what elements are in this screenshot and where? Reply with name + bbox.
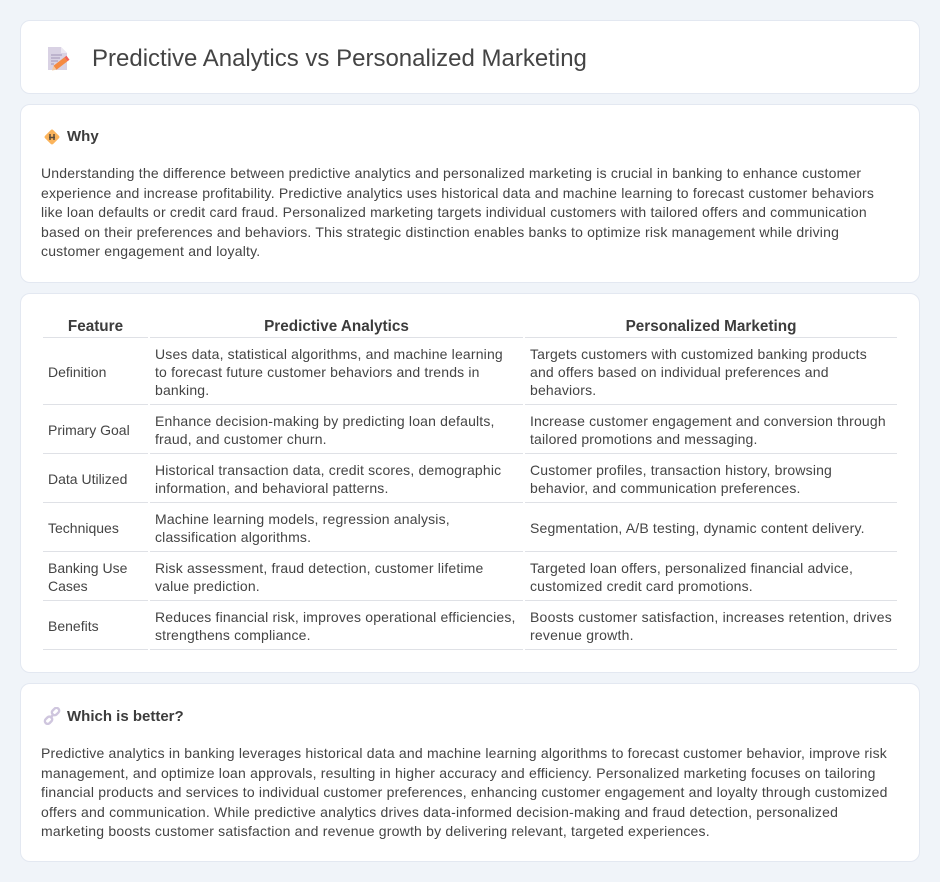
row label: definition: Definition	[48, 364, 106, 380]
cell: personalized benefits	[530, 609, 892, 643]
cell: personalized use cases: customized credit card promotions.	[530, 578, 753, 594]
cell: predictive benefits	[155, 609, 516, 643]
cell: personalized benefits: Boosts customer satisfaction, increases retention, drives	[530, 609, 892, 625]
cell: predictive benefits: strengthens compliance.	[155, 627, 311, 643]
text: which is better paragraph: offers and communication. While predictive analytics drives data-informed decision-making and fraud detection, personalized	[41, 804, 838, 820]
text: which is better paragraph: management, and optimize loan approvals, resulting in higher accuracy and efficiency. Personalized marketing focuses on tailoring	[41, 765, 876, 781]
cell: predictive use cases	[155, 560, 483, 594]
panel: why	[20, 104, 920, 283]
cell: predictive data: Historical transaction data, credit scores, demographic	[155, 462, 501, 478]
icon: warning diamond	[44, 130, 60, 144]
table header: feature: Feature	[68, 318, 123, 335]
cell: personalized data: behavior, and communication preferences.	[530, 480, 801, 496]
icon: chain link	[44, 707, 60, 725]
text: why paragraph: Understanding the difference between predictive analytics and personalized marketing is crucial in banking to enhance customer	[41, 165, 861, 181]
row label: primary goal: Primary Goal	[48, 422, 130, 438]
panel: comparison table	[20, 293, 920, 673]
row label: techniques: Techniques	[48, 520, 119, 536]
cell: predictive definition	[155, 346, 503, 398]
text: why paragraph: like loan defaults or credit card fraud. Personalized marketing targets individual customers with tailored offers and communication	[41, 204, 867, 220]
cell: personalized definition: behaviors.	[530, 382, 596, 398]
cell: personalized data	[530, 462, 832, 496]
text: which is better paragraph: financial products and services to individual customer preferences, enhancing customer engagement and loyalty through customized	[41, 784, 888, 800]
cell: predictive use cases: Risk assessment, fraud detection, customer lifetime	[155, 560, 483, 576]
row label: data utilized: Data Utilized	[48, 471, 127, 487]
cell: predictive goal: Enhance decision-making by predicting loan defaults,	[155, 413, 495, 429]
cell: personalized use cases	[530, 560, 853, 594]
cell: predictive benefits: Reduces financial risk, improves operational efficiencies,	[155, 609, 516, 625]
panel: which is better	[20, 683, 920, 862]
table header: predictive analytics: Predictive Analytics	[264, 318, 409, 335]
text: why paragraph: experience and increase profitability. Predictive analytics uses historical data and machine learning to forecast customer behaviors	[41, 185, 874, 201]
heading: which is better: Which is better?	[67, 708, 184, 725]
cell: personalized techniques: Segmentation, A/B testing, dynamic content delivery.	[530, 520, 865, 536]
cell: predictive definition: to forecast future customer behaviors and trends in	[155, 364, 480, 380]
cell: personalized benefits: revenue growth.	[530, 627, 634, 643]
heading: why: Why	[67, 128, 99, 145]
panel: title card	[20, 20, 920, 94]
cell: predictive techniques: Machine learning models, regression analysis,	[155, 511, 450, 527]
cell: personalized data: Customer profiles, transaction history, browsing	[530, 462, 832, 478]
cell: personalized use cases: Targeted loan offers, personalized financial advice,	[530, 560, 853, 576]
text: why paragraph: based on their preferences and behaviors. This strategic distinction enables banks to optimize risk management while driving	[41, 224, 839, 240]
icon: document with pencil	[48, 47, 70, 70]
text: which is better paragraph: Predictive analytics in banking leverages historical data and machine learning algorithms to forecast customer behavior, improve risk	[41, 745, 887, 761]
row label: banking use cases: Banking Use	[48, 560, 127, 576]
cell: personalized goal: tailored promotions and messaging.	[530, 431, 758, 447]
text: which is better paragraph	[41, 745, 888, 839]
table header: personalized marketing: Personalized Marketing	[626, 318, 796, 335]
cell: personalized definition: Targets customers with customized banking products	[530, 346, 867, 362]
text: which is better paragraph: marketing boosts customer satisfaction and revenue growth by delivering relevant, targeted experiences.	[41, 823, 710, 839]
cell: personalized goal: Increase customer engagement and conversion through	[530, 413, 886, 429]
row label: banking use cases	[48, 560, 127, 594]
title: Predictive Analytics vs Personalized Marketing	[92, 45, 587, 72]
row label: benefits: Benefits	[48, 618, 99, 634]
row label: banking use cases: Cases	[48, 578, 88, 594]
cell: personalized goal	[530, 413, 886, 447]
text: why paragraph	[41, 165, 874, 259]
cell: predictive goal: fraud, and customer churn.	[155, 431, 327, 447]
cell: predictive techniques	[155, 511, 450, 545]
cell: predictive definition: Uses data, statistical algorithms, and machine learning	[155, 346, 503, 362]
cell: personalized definition: and offers based on individual preferences and	[530, 364, 829, 380]
cell: predictive data: information, and behavioral patterns.	[155, 480, 389, 496]
cell: personalized definition	[530, 346, 867, 398]
cell: predictive techniques: classification algorithms.	[155, 529, 311, 545]
cell: predictive definition: banking.	[155, 382, 209, 398]
text: why paragraph: customer engagement and loyalty.	[41, 243, 260, 259]
cell: predictive data	[155, 462, 501, 496]
cell: predictive use cases: value prediction.	[155, 578, 260, 594]
cell: predictive goal	[155, 413, 495, 447]
